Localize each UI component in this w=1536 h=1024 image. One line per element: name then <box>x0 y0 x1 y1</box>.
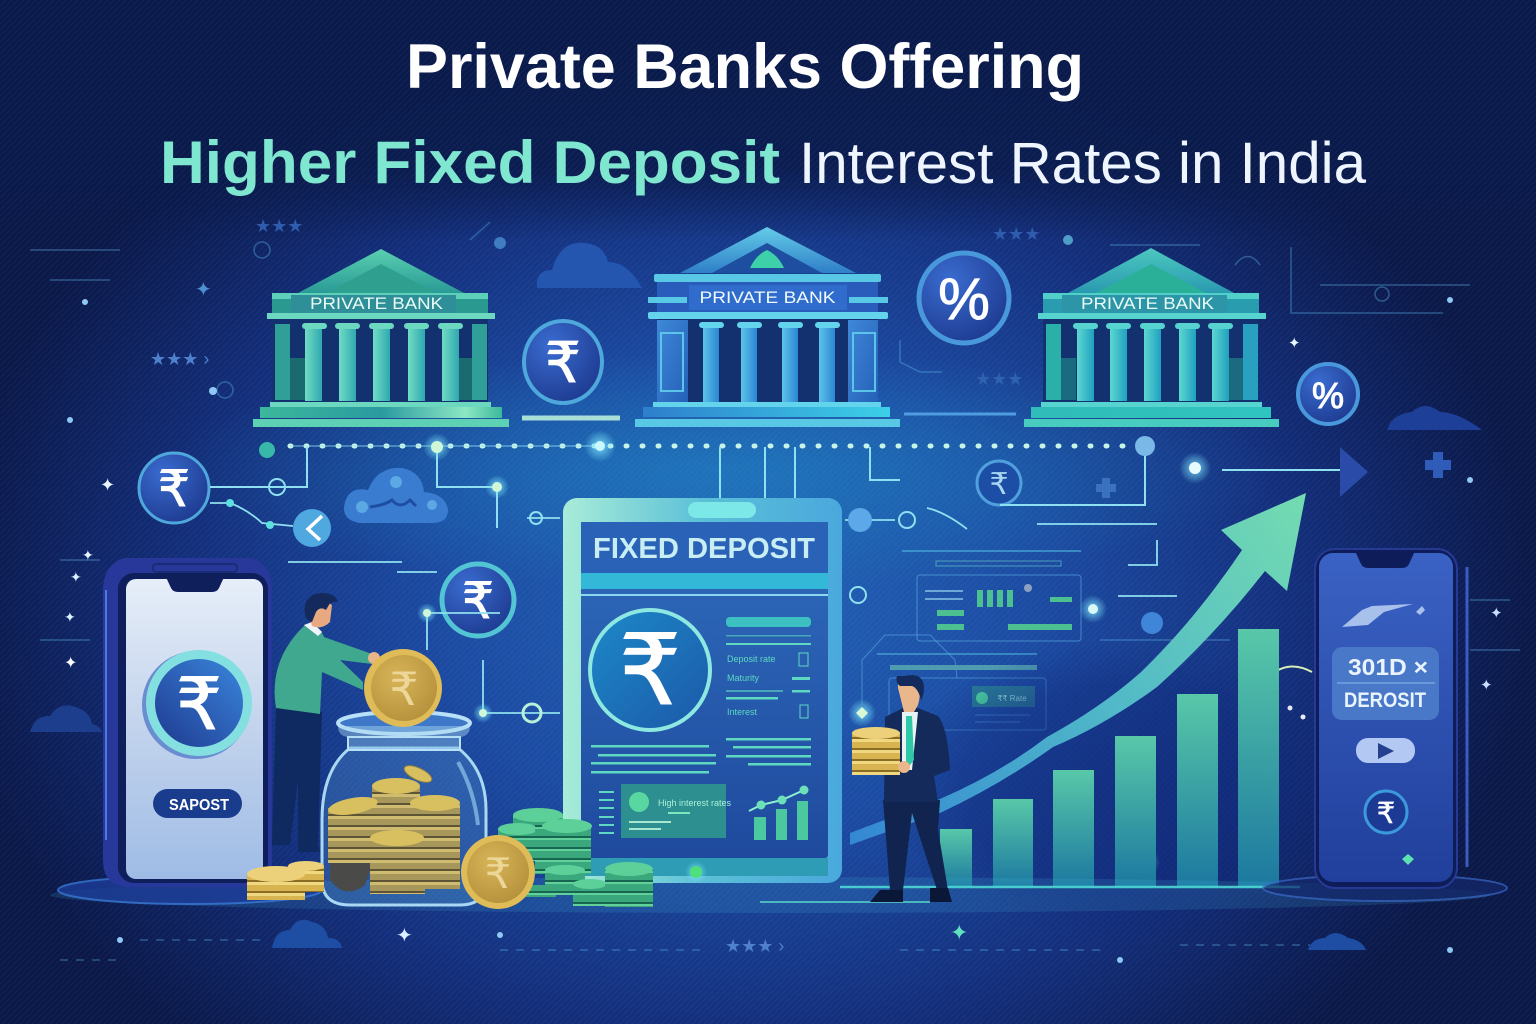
coin stacks: green <box>498 808 653 907</box>
tablet home button <box>685 861 707 883</box>
title <box>160 32 1367 196</box>
sparkles and stars: ✦ <box>950 920 968 945</box>
tablet details <box>591 617 811 774</box>
sparkles and stars: ✦ <box>195 279 212 301</box>
cloud: lower left <box>272 920 342 948</box>
phone rupee icon: ₹ <box>1377 798 1395 830</box>
icon: rupee badge beside left bank: ₹ <box>545 331 581 394</box>
floor glow line <box>50 875 1507 913</box>
cloud: far left <box>30 705 102 732</box>
tablet rupee emblem: ₹ <box>619 615 681 725</box>
title line 2: Higher Fixed Deposit <box>160 129 780 196</box>
tablet details: Interest <box>727 707 758 717</box>
tablet mini chart <box>749 786 808 840</box>
icon: rupee badge mid-left: ₹ <box>462 573 494 629</box>
icon: percent badge large <box>919 253 1009 343</box>
tablet rupee emblem <box>590 610 710 730</box>
sparkles and stars <box>64 216 1503 963</box>
sparkles and stars: ✦ <box>1480 677 1493 694</box>
sparkles and stars: ✦ <box>396 925 413 947</box>
icon: rupee badge left: ₹ <box>158 461 190 517</box>
icon: rupee badge small right: ₹ <box>989 468 1009 501</box>
play button <box>1356 738 1415 763</box>
tablet header: FIXED DEPOSIT <box>593 533 815 565</box>
tablet: fixed deposit <box>563 498 842 883</box>
icon: percent badge small: % <box>1312 375 1344 416</box>
growth bar chart <box>890 629 1350 940</box>
title line 2 <box>160 129 1367 196</box>
coins in hand <box>852 727 910 775</box>
glass jar with coins <box>322 712 486 905</box>
tablet details: Deposit rate <box>727 654 776 664</box>
tablet rate panel: High interest rates <box>658 798 732 808</box>
growth arrow <box>850 493 1306 845</box>
cloud: lower right <box>1308 933 1366 950</box>
person placing coin <box>272 593 380 852</box>
deposit card <box>1332 647 1439 720</box>
sparkles and stars: ✦ <box>64 655 77 672</box>
bank: left private bank: PRIVATE BANK <box>310 294 444 313</box>
icon: rupee badge mid-left <box>442 564 514 636</box>
rupee emblem: ₹ <box>176 665 222 745</box>
phone button label: SAPOST <box>169 797 229 814</box>
cloud: middle left <box>344 468 448 523</box>
sparkles and stars: ✦ <box>70 569 82 585</box>
sparkles and stars: ✦ <box>1288 335 1301 352</box>
HUD panel: lower <box>862 635 1046 730</box>
sparkles and stars: ✦ <box>100 475 115 495</box>
businessman holding coins <box>852 675 952 902</box>
left phone <box>103 558 272 887</box>
HUD panel: upper <box>902 551 1081 641</box>
clouds <box>30 243 1482 950</box>
background circuit decorations <box>30 222 1520 960</box>
sparkles and stars: ✦ <box>82 547 94 563</box>
icon: percent badge small <box>1298 364 1358 424</box>
icon: back chevron <box>293 509 331 547</box>
icon: rupee badge small right <box>977 461 1021 505</box>
tablet rate panel <box>599 784 732 838</box>
coin: front gold <box>461 835 535 909</box>
deposit card: DEROSIT <box>1344 689 1426 712</box>
phone rupee icon <box>1365 791 1407 833</box>
title line 2: Interest Rates in India <box>799 131 1367 196</box>
icon: rupee badge left <box>139 453 209 523</box>
cloud: right <box>1387 406 1482 430</box>
bank: right private bank: PRIVATE BANK <box>1081 294 1215 313</box>
icon: percent badge large: % <box>938 267 990 332</box>
coin: dropping into jar: ₹ <box>389 663 419 715</box>
bank: centre private bank: PRIVATE BANK <box>700 288 836 307</box>
coin: dropping into jar <box>364 649 442 727</box>
rupee emblem <box>142 650 252 759</box>
cloud: upper <box>537 243 642 288</box>
deposit card: 301D × <box>1348 654 1428 680</box>
phone button label <box>153 789 242 818</box>
icon: rupee badge beside left bank <box>524 321 602 403</box>
network connector lines <box>210 414 1340 722</box>
sparkles and stars: ★★★ › <box>150 349 209 369</box>
bank: right private bank <box>1024 248 1279 427</box>
sparkles and stars: ★★★ <box>975 369 1023 389</box>
sparkles and stars: ✦ <box>64 609 76 625</box>
sparkles and stars: ★★★ › <box>725 936 784 956</box>
tablet details: Maturity <box>727 673 760 683</box>
coin: front gold: ₹ <box>485 850 511 897</box>
sparkles and stars: ★★★ <box>255 216 303 236</box>
network glow nodes <box>226 430 1451 874</box>
HUD panel: lower: ₹₹ Rate <box>997 694 1027 703</box>
title line 1: Private Banks Offering <box>406 32 1084 102</box>
sparkles and stars: ★★★ <box>992 224 1040 244</box>
bank: centre private bank <box>635 227 900 427</box>
bank: left private bank <box>253 249 509 427</box>
tablet header <box>581 522 828 596</box>
right phone <box>1315 549 1467 888</box>
coin stacks: gold left of jar <box>247 861 324 900</box>
sparkles and stars: ✦ <box>1490 605 1503 622</box>
coin stacks in jar <box>327 762 460 894</box>
